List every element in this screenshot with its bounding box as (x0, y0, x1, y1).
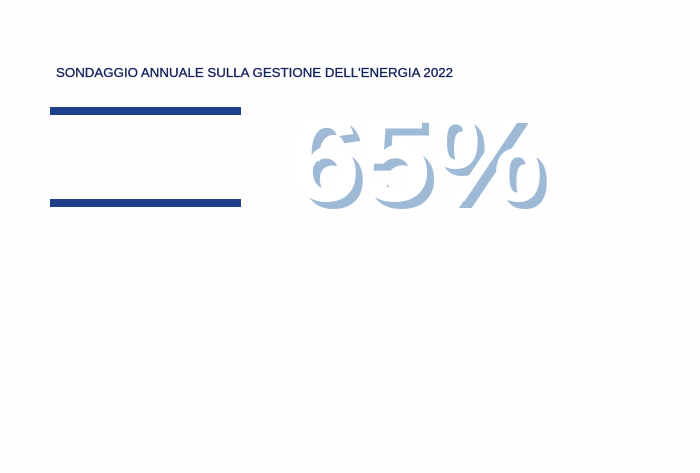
percentage shadow: 65% (297, 98, 550, 235)
big percentage with shadow (290, 91, 550, 235)
title: SONDAGGIO ANNUALE SULLA GESTIONE DELL'ENERGIA 2022 (56, 65, 453, 80)
top bar (50, 107, 241, 115)
bottom bar (50, 199, 241, 207)
percentage value: 65% (290, 91, 543, 228)
